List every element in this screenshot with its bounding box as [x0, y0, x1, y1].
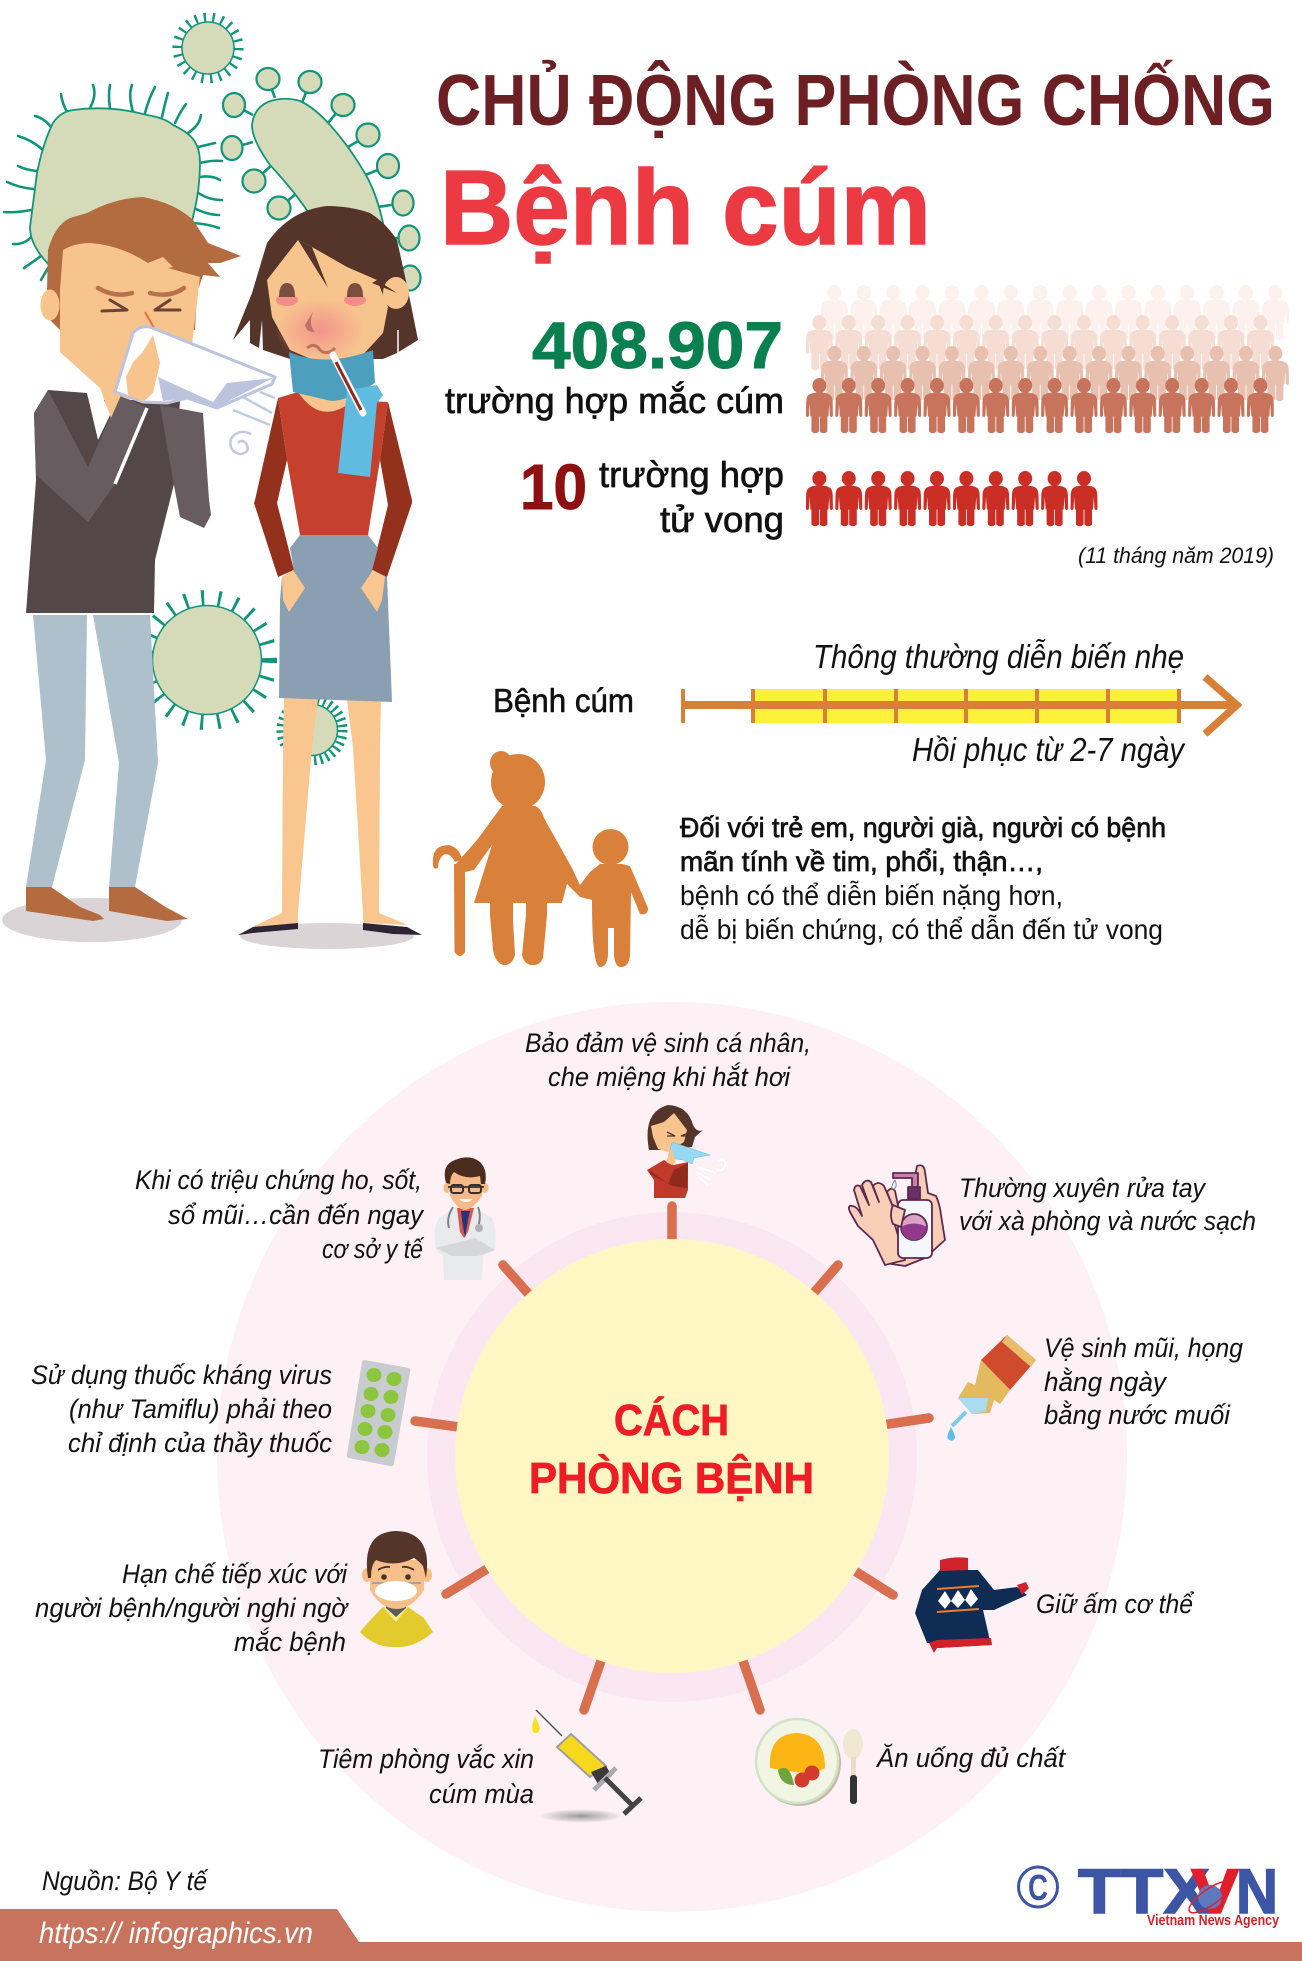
item: nasal hygiene text: Vệ sinh mũi, họng: [1044, 1333, 1243, 1363]
icon: sweater: [915, 1557, 1029, 1653]
icon: syringe: [532, 1710, 641, 1823]
icon: nasal drops bottle: [947, 1335, 1036, 1441]
item: nasal hygiene text: hằng ngày: [1044, 1366, 1167, 1397]
icon: antiviral pill blister: [347, 1360, 410, 1466]
pictogram: deaths: [806, 471, 1098, 526]
item: vaccination text: [318, 1743, 534, 1809]
item: antiviral text: chỉ định của thầy thuốc: [68, 1428, 332, 1458]
text line 4: dễ bị biến chứng, có thể dẫn đến tử vong: [680, 914, 1163, 945]
item: personal hygiene text: Bảo đảm vệ sinh cá nhân,: [525, 1028, 811, 1058]
center heading: PHÒNG BỆNH: [529, 1453, 814, 1503]
item: antiviral text: (như Tamiflu) phải theo: [69, 1394, 332, 1424]
label: deaths line 2: tử vong: [660, 499, 784, 540]
date note: (11 tháng năm 2019): [1078, 543, 1274, 568]
logo: TTXVN: V: [1191, 1857, 1239, 1927]
icon: person wearing mask: [360, 1531, 433, 1647]
illustration: sick woman with thermometer: [233, 206, 422, 949]
center heading: [529, 1395, 814, 1503]
text line 3: bệnh có thể diễn biến nặng hơn,: [680, 880, 1063, 911]
icon: doctor: [435, 1157, 496, 1280]
timeline label: Bệnh cúm: [493, 682, 634, 719]
timeline caption: top: Thông thường diễn biến nhẹ: [813, 638, 1184, 675]
item: vaccination text: cúm mùa: [429, 1779, 534, 1809]
item: hand washing icon: [849, 1165, 945, 1266]
virus: large blob left: [4, 85, 222, 280]
item: personal hygiene text: [525, 1028, 811, 1092]
center heading: CÁCH: [614, 1395, 729, 1445]
title: line 2: Bệnh cúm: [440, 149, 931, 267]
item: personal hygiene text: che miệng khi hắt hơi: [548, 1061, 791, 1092]
paragraph: at-risk groups: [680, 812, 1166, 945]
statistic: deaths: [520, 451, 784, 540]
item: nasal hygiene text: bằng nước muối: [1044, 1399, 1231, 1430]
virus illustrations behind the characters: [4, 18, 420, 760]
number: deaths: 10: [520, 451, 587, 523]
footer URL: https:// infographics.vn: [39, 1917, 313, 1950]
item: keep warm text: Giữ ấm cơ thể: [1036, 1589, 1195, 1619]
item: see a doctor text: sổ mũi…cần đến ngay: [168, 1200, 424, 1230]
logo: TTXVN: [1018, 1857, 1280, 1929]
text line 1: Đối với trẻ em, người già, người có bệnh: [680, 812, 1166, 843]
label: deaths line 1: trường hợp: [599, 454, 784, 495]
logo: TTXVN: C: [1028, 1867, 1048, 1908]
pictogram: infected people: [806, 285, 1289, 433]
illustration: sneezing man: [2, 197, 275, 942]
item: hand washing text: [959, 1173, 1256, 1236]
item: antiviral text: Sử dụng thuốc kháng virus: [31, 1360, 332, 1390]
logo: TTXVN: Vietnam News Agency: [1147, 1912, 1280, 1929]
item: limit contact text: Hạn chế tiếp xúc với: [122, 1559, 348, 1589]
diagram: concentric prevention circle: [217, 1002, 1127, 1912]
item: nasal hygiene text: [1044, 1333, 1243, 1430]
timeline caption: bottom: Hồi phục từ 2-7 ngày: [912, 731, 1186, 768]
logo: TTXVN: TTX: [1078, 1857, 1210, 1927]
timeline arrow: [683, 677, 1238, 734]
item: limit contact text: [35, 1559, 350, 1657]
item: limit contact text: mắc bệnh: [234, 1626, 346, 1657]
icon: elderly woman and child: [433, 751, 648, 967]
item: nutrition text: Ăn uống đủ chất: [875, 1743, 1066, 1773]
item: see a doctor text: cơ sở y tế: [322, 1234, 425, 1264]
virus: small behind leg: [282, 700, 342, 760]
footer banner: [0, 1909, 1302, 1961]
icon: sneezing woman: [647, 1105, 725, 1198]
virus: small round top: [178, 18, 238, 78]
item: hand washing text: Thường xuyên rửa tay: [959, 1173, 1206, 1203]
number: cases: 408.907: [532, 308, 783, 382]
item: hand washing text: với xà phòng và nước sạch: [959, 1206, 1256, 1236]
virus: elongated bacillus right: [222, 68, 420, 290]
virus: round lower: [147, 600, 267, 720]
item: limit contact text: người bệnh/người nghi ngờ: [35, 1593, 350, 1623]
icon: plate of food and spoon: [756, 1719, 863, 1806]
text line 2: mãn tính về tim, phổi, thận…,: [680, 846, 1043, 877]
statistic: cases: [445, 308, 784, 421]
item: see a doctor text: [135, 1165, 425, 1264]
item: see a doctor text: Khi có triệu chứng ho, sốt,: [135, 1165, 422, 1195]
item: vaccination text: Tiêm phòng vắc xin: [318, 1743, 534, 1774]
logo: TTXVN: N: [1236, 1857, 1278, 1927]
label: cases: trường hợp mắc cúm: [445, 380, 784, 421]
item: antiviral text: [31, 1360, 332, 1458]
source: Nguồn: Bộ Y tế: [42, 1866, 209, 1896]
